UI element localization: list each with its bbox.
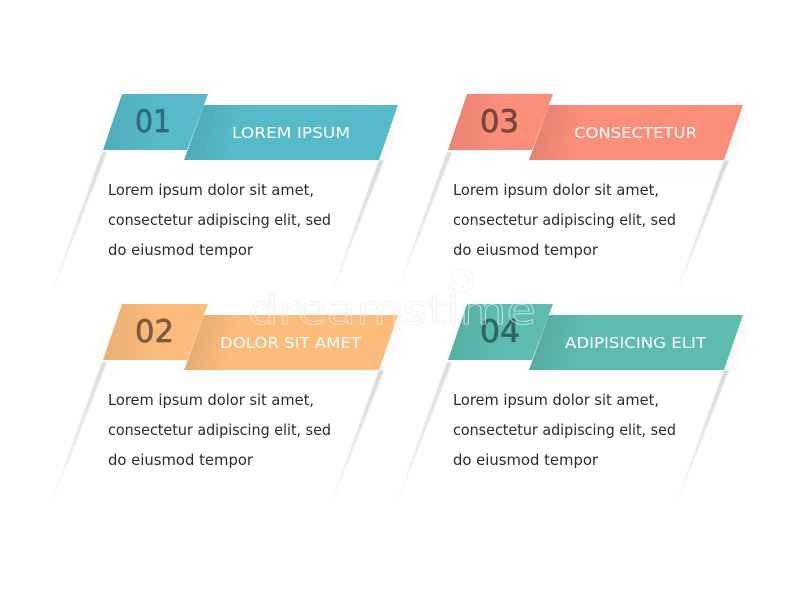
body text: Lorem ipsum dolor sit amet, (108, 391, 314, 409)
body text (453, 391, 676, 469)
body text (108, 391, 331, 469)
heading ribbon (529, 315, 743, 370)
body text: do eiusmod tempor (108, 451, 254, 469)
panel: card 02 (53, 304, 402, 498)
number 02: 02 (135, 314, 174, 350)
body text (108, 181, 331, 259)
body text: do eiusmod tempor (108, 241, 254, 259)
number 03: 03 (480, 104, 519, 140)
number tab (103, 304, 208, 360)
body text: consectetur adipiscing elit, sed (108, 421, 331, 439)
number 01: 01 (135, 104, 171, 140)
heading: ADIPISICING ELIT (565, 334, 707, 352)
body text: consectetur adipiscing elit, sed (453, 421, 676, 439)
watermark (248, 269, 536, 334)
heading ribbon (529, 105, 743, 160)
body text: do eiusmod tempor (453, 241, 599, 259)
left side shadow (398, 152, 452, 288)
body text: consectetur adipiscing elit, sed (453, 211, 676, 229)
heading ribbon (184, 105, 398, 160)
body text: Lorem ipsum dolor sit amet, (453, 181, 659, 199)
panel: card 03 (398, 94, 747, 288)
heading ribbon (184, 315, 398, 370)
body text: Lorem ipsum dolor sit amet, (108, 181, 314, 199)
number tab (103, 94, 208, 150)
panel: card 04 (398, 304, 747, 498)
heading: CONSECTETUR (574, 124, 697, 142)
number 04: 04 (480, 314, 520, 350)
left side shadow (53, 362, 107, 498)
left side shadow (53, 152, 107, 288)
left side shadow (398, 362, 452, 498)
panel: card 01 (53, 94, 402, 288)
body text: Lorem ipsum dolor sit amet, (453, 391, 659, 409)
number tab (448, 304, 553, 360)
heading: DOLOR SIT AMET (220, 334, 362, 352)
heading: LOREM IPSUM (232, 124, 350, 142)
right side shadow (678, 108, 747, 288)
number tab (448, 94, 553, 150)
body text: consectetur adipiscing elit, sed (108, 211, 331, 229)
body text (453, 181, 676, 259)
right side shadow (333, 108, 402, 288)
right side shadow (678, 318, 747, 498)
watermark: dreamstime (248, 288, 536, 334)
body text: do eiusmod tempor (453, 451, 599, 469)
right side shadow (333, 318, 402, 498)
